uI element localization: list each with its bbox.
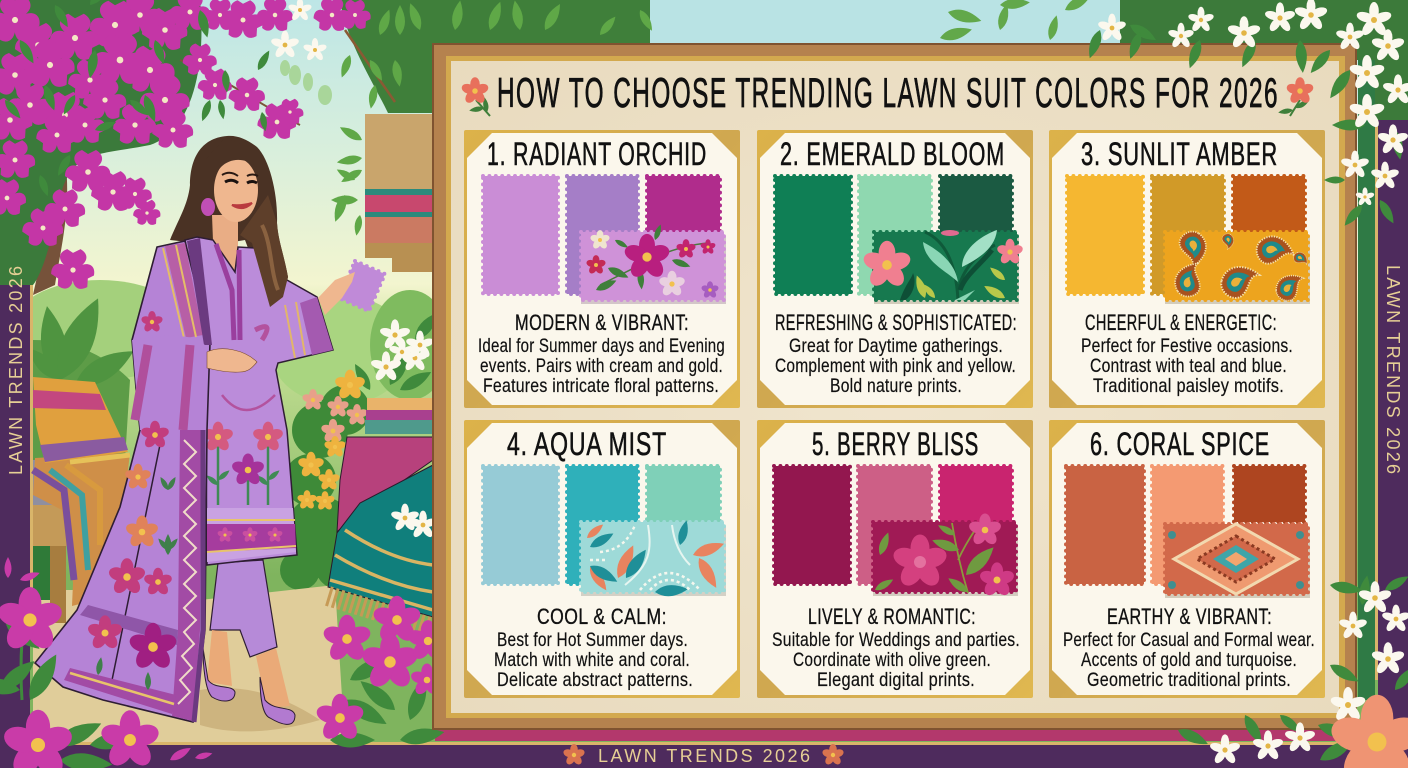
hanging textile	[331, 114, 433, 272]
panel: 1 Radiant Orchid: Features intricate floral patterns.	[483, 375, 719, 397]
hair	[170, 136, 288, 307]
panel: 4 Aqua Mist: Delicate abstract patterns.	[497, 669, 693, 691]
panel: 5 Berry Bliss: Elegant digital prints.	[817, 669, 975, 691]
panel: 6 Coral Spice: Accents of gold and turquoise.	[1081, 649, 1297, 671]
panel: 6 Coral Spice: Geometric traditional prints.	[1087, 669, 1291, 691]
panel: 5 Berry Bliss: LIVELY & ROMANTIC:	[808, 604, 976, 629]
hands and fabric swatch	[207, 261, 385, 372]
dupatta	[35, 241, 210, 722]
panel: 3 Sunlit Amber: Perfect for Festive occasions.	[1081, 335, 1293, 357]
icon: left flower	[460, 77, 490, 116]
jasmine and coral flower: bottom right	[1176, 573, 1408, 768]
side label right: LAWN TRENDS 2026	[1383, 265, 1403, 474]
panel: 4 Aqua Mist: Best for Hot Summer days.	[497, 629, 688, 651]
panel: 1 Radiant Orchid: events. Pairs with cream and gold.	[480, 355, 723, 377]
panel: 4 Aqua Mist	[464, 420, 740, 698]
panel: 5 Berry Bliss: Coordinate with olive green.	[793, 649, 991, 671]
fabric sample: paisley	[1165, 227, 1310, 304]
panel: 1 Radiant Orchid	[464, 130, 740, 408]
panel: 3 Sunlit Amber	[1049, 130, 1325, 408]
panel: 2 Emerald Bloom	[757, 130, 1033, 408]
panel: 3 Sunlit Amber: CHEERFUL & ENERGETIC:	[1085, 310, 1277, 335]
panel: 3 Sunlit Amber: Traditional paisley motifs.	[1093, 375, 1284, 397]
panel: 2 Emerald Bloom: Complement with pink and yellow.	[775, 355, 1016, 377]
panel: 2 Emerald Bloom: Bold nature prints.	[830, 375, 962, 397]
panel: 3 Sunlit Amber: 3. SUNLIT AMBER	[1081, 136, 1278, 172]
bottom label	[562, 744, 845, 766]
cushion and bench	[33, 377, 130, 623]
bottom label: LAWN TRENDS 2026	[598, 746, 810, 766]
panel: 5 Berry Bliss: Suitable for Weddings and parties.	[772, 629, 1020, 651]
woman in orchid lawn suit	[35, 136, 385, 724]
panel: 4 Aqua Mist: 4. AQUA MIST	[507, 426, 667, 462]
fabric sample: abstract	[581, 519, 726, 597]
foreground flowers: bottom left	[0, 557, 213, 768]
front hair	[240, 195, 288, 307]
flower bush and fabric table	[297, 309, 443, 628]
legs	[207, 630, 290, 708]
fabric sample: geometric	[1165, 524, 1310, 598]
neck	[212, 215, 238, 273]
fabric sample: roses	[873, 514, 1018, 598]
panel: 6 Coral Spice: EARTHY & VIBRANT:	[1107, 604, 1272, 629]
panel: 1 Radiant Orchid: MODERN & VIBRANT:	[515, 310, 689, 335]
panel: 2 Emerald Bloom: REFRESHING & SOPHISTICATED:	[775, 310, 1017, 335]
face	[201, 138, 258, 222]
wooden frame with cream panel	[432, 43, 1357, 730]
pants	[210, 560, 277, 657]
panel: 4 Aqua Mist: COOL & CALM:	[537, 604, 667, 629]
icon: right flower	[1278, 77, 1315, 116]
foreground flowers: bottom centre	[314, 596, 450, 748]
panel: 6 Coral Spice: Perfect for Casual and Formal wear.	[1063, 629, 1315, 651]
panel: 2 Emerald Bloom: Great for Daytime gatherings.	[789, 335, 1003, 357]
panel: 1 Radiant Orchid: 1. RADIANT ORCHID	[487, 136, 707, 172]
panel: 2 Emerald Bloom: 2. EMERALD BLOOM	[780, 136, 1005, 172]
panel: 6 Coral Spice: 6. CORAL SPICE	[1090, 426, 1270, 462]
panel: 5 Berry Bliss	[757, 420, 1033, 698]
tree with bougainvillea	[0, 0, 655, 295]
side label left: LAWN TRENDS 2026	[6, 266, 26, 475]
panel: 5 Berry Bliss: 5. BERRY BLISS	[812, 426, 979, 462]
kurta	[185, 237, 333, 565]
panel: 6 Coral Spice	[1049, 420, 1325, 698]
panel: 3 Sunlit Amber: Contrast with teal and blue.	[1090, 355, 1287, 377]
jasmine garland: top right	[939, 0, 1408, 229]
fabric sample: floral	[581, 224, 726, 304]
panel: 1 Radiant Orchid: Ideal for Summer days and Evening	[478, 335, 725, 357]
panel: 4 Aqua Mist: Match with white and coral.	[494, 649, 690, 671]
shoes	[203, 648, 235, 701]
fabric sample: leaves	[861, 230, 1024, 304]
